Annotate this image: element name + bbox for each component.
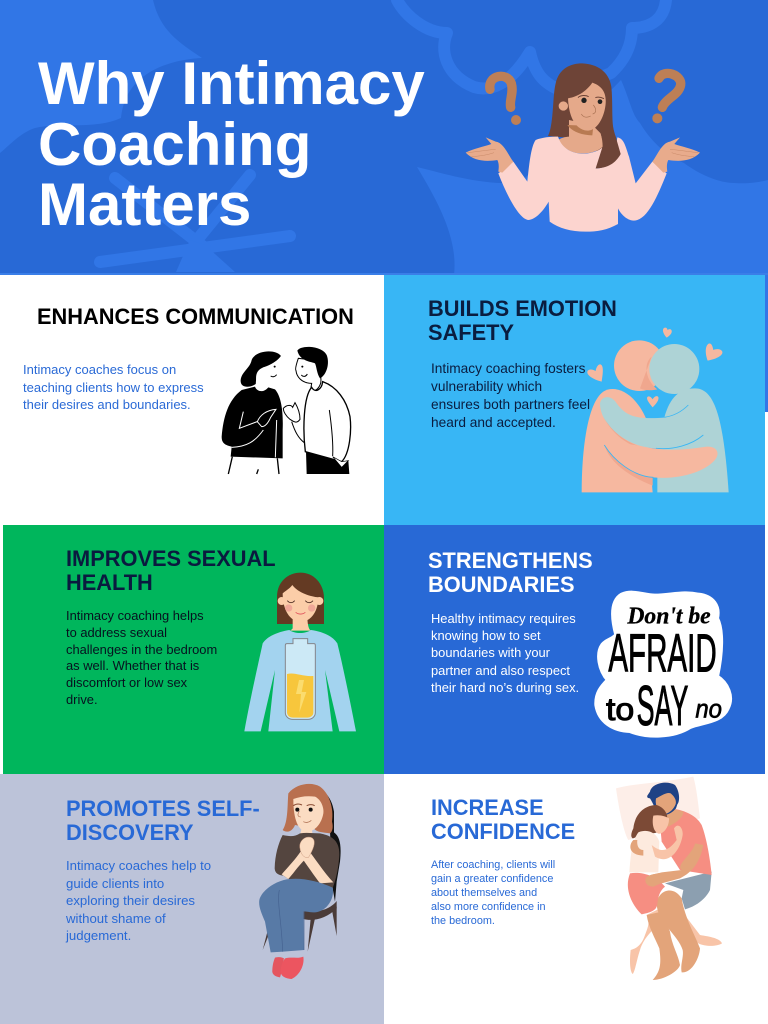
heading <box>428 548 593 597</box>
icon: cuddling couple <box>616 776 722 980</box>
body text <box>66 858 211 943</box>
heading: STRENGTHENS <box>428 548 593 573</box>
panel: enhances communication <box>0 275 384 525</box>
heading: IMPROVES SEXUAL <box>66 546 276 571</box>
heading: BOUNDARIES <box>428 572 575 597</box>
heading: CONFIDENCE <box>431 819 575 844</box>
body text: vulnerability which <box>431 379 542 394</box>
body text: Intimacy coaching helps <box>66 608 204 623</box>
heading: HEALTH <box>66 570 153 595</box>
body text: as well. Whether that is <box>66 658 199 673</box>
body text: heard and accepted. <box>431 415 556 430</box>
body text: without shame of <box>66 910 166 926</box>
body text: Intimacy coaches focus on <box>23 362 176 377</box>
body text: their hard no’s during sex. <box>431 680 579 695</box>
body text: guide clients into <box>66 876 164 890</box>
panel: promotes self-discovery <box>0 774 384 1024</box>
icon: shrugging woman with question marks <box>466 63 700 232</box>
title: Why Intimacy <box>38 50 425 117</box>
heading: PROMOTES SELF- <box>66 796 260 821</box>
body text: their desires and boundaries. <box>23 397 191 412</box>
hero background shapes <box>0 0 768 275</box>
icon: woman with battery <box>244 572 356 732</box>
body text: knowing how to set <box>431 628 541 643</box>
panel: hero header <box>0 0 768 275</box>
sticker: don't be afraid to say no <box>594 590 732 738</box>
body text <box>431 611 579 695</box>
body text: ensures both partners feel <box>431 397 590 412</box>
body text: drive. <box>66 692 98 707</box>
body text: Intimacy coaching fosters <box>431 361 585 376</box>
body text: discomfort or low sex <box>66 675 187 690</box>
title: Coaching <box>38 110 311 178</box>
body text: After coaching, clients will <box>431 859 555 871</box>
icon: two people talking <box>222 346 352 474</box>
panel: strengthens boundaries <box>384 525 765 774</box>
body text: Healthy intimacy requires <box>431 611 576 626</box>
body text <box>431 859 555 927</box>
body text: exploring their desires <box>66 893 195 908</box>
body text: challenges in the bedroom <box>66 642 217 657</box>
body text <box>66 608 217 707</box>
body text: partner and also respect <box>431 663 570 678</box>
heading: INCREASE <box>431 795 544 820</box>
body text: gain a greater confidence <box>431 873 553 885</box>
title: Matters <box>38 171 251 238</box>
heading: DISCOVERY <box>66 820 194 845</box>
body text <box>431 361 590 430</box>
body text: judgement. <box>66 928 131 943</box>
panel: improves sexual health <box>3 525 384 774</box>
body text: boundaries with your <box>431 645 550 660</box>
sticker: don't be afraid to say no: to <box>606 691 634 727</box>
body text: Intimacy coaches help to <box>66 858 211 873</box>
body text: the bedroom. <box>431 915 495 927</box>
sticker: don't be afraid to say no: Don't be <box>626 603 711 629</box>
sticker: don't be afraid to say no: no <box>695 693 722 723</box>
heading: ENHANCES COMMUNICATION <box>37 304 354 329</box>
body text <box>23 362 204 412</box>
hug illustration <box>582 328 729 492</box>
edge strip <box>765 275 768 412</box>
heading <box>66 796 260 845</box>
heading <box>66 546 276 595</box>
heading: SAFETY <box>428 320 514 345</box>
body text: to address sexual <box>66 625 167 640</box>
body text: also more confidence in <box>431 901 546 913</box>
body text: teaching clients how to express <box>23 380 204 394</box>
heading: BUILDS EMOTION <box>428 296 617 321</box>
icon: seated woman <box>259 784 341 979</box>
title <box>38 50 425 238</box>
heading <box>431 795 575 844</box>
panel: increase confidence <box>384 774 768 1024</box>
sticker: don't be afraid to say no: SAY <box>637 675 688 738</box>
heading <box>428 296 617 345</box>
panel: builds emotion safety <box>384 275 765 525</box>
body text: about themselves and <box>431 887 537 899</box>
